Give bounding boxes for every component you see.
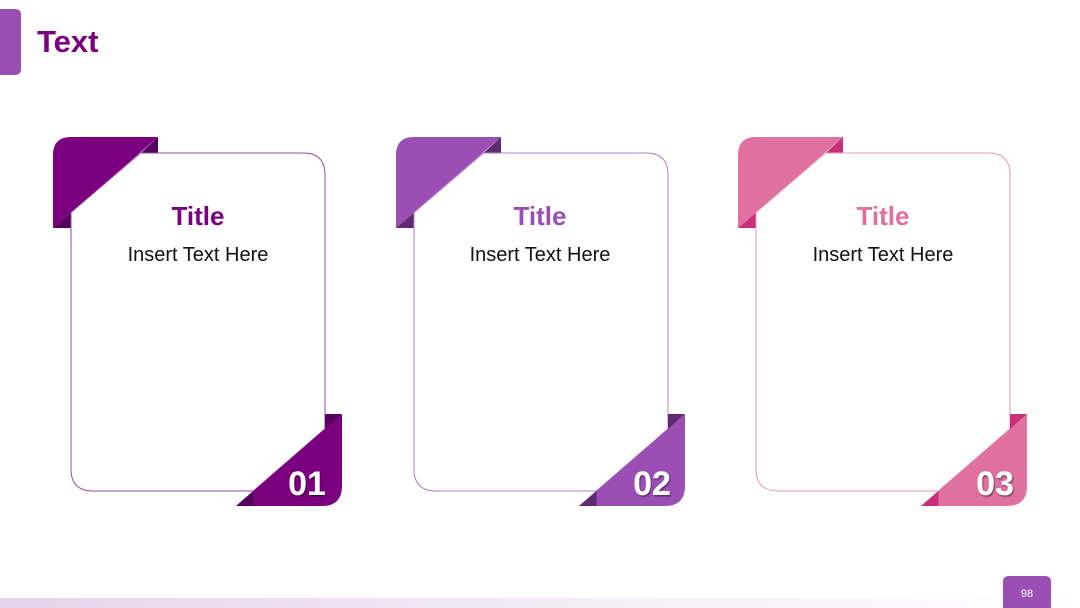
card 03 text: Insert Text Here	[813, 244, 953, 266]
card 03 number: 03	[976, 465, 1014, 503]
page number badge: 98	[1021, 588, 1033, 600]
header accent bar	[0, 9, 21, 75]
card 02 text: Insert Text Here	[470, 244, 610, 266]
card 01 title: Title	[172, 201, 224, 231]
card 01 text: Insert Text Here	[128, 244, 268, 266]
page title: Text	[37, 24, 98, 59]
card 02 title: Title	[514, 201, 566, 231]
panel: card 03	[738, 137, 1027, 506]
panel: card 02	[396, 137, 685, 506]
card 02 number: 02	[633, 465, 671, 503]
panel: card 01	[53, 137, 342, 506]
card 01 number: 01	[288, 465, 326, 503]
card 03 title: Title	[857, 201, 909, 231]
page number badge	[1003, 576, 1051, 608]
